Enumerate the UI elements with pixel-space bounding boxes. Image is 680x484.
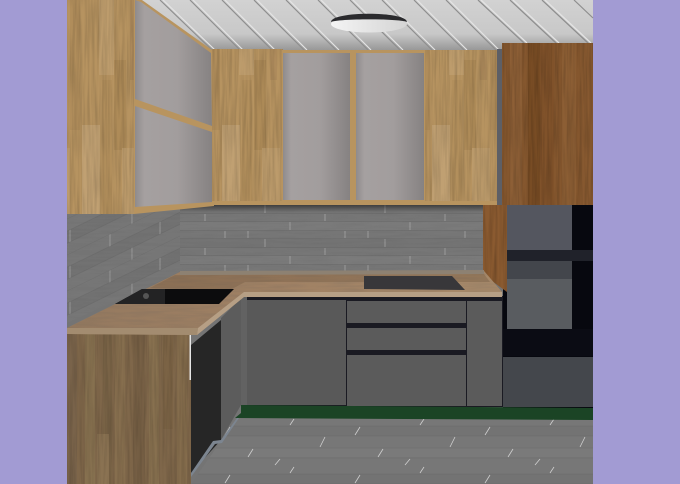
right niche with shelves	[503, 205, 593, 408]
ceiling light	[331, 14, 407, 32]
gap between upper cabinets	[497, 49, 503, 205]
upper centre glass double door	[282, 50, 426, 205]
sink	[115, 289, 234, 304]
upper middle wood panel right	[212, 50, 497, 205]
upper right walnut cabinet	[502, 43, 593, 205]
walnut column beside hob	[483, 205, 507, 292]
ceiling	[135, 0, 593, 52]
tiled backsplash: left wall	[67, 205, 180, 323]
L-shaped worktop	[67, 270, 502, 335]
upper corner glass door	[134, 0, 214, 214]
scene base fill	[67, 0, 593, 484]
tall wood end panel	[67, 334, 191, 484]
base cabinets	[241, 296, 503, 407]
left side base doors	[191, 296, 247, 477]
tiled backsplash: back wall	[134, 205, 504, 273]
floor	[191, 418, 593, 484]
upper left wood cabinet side	[67, 0, 134, 214]
green skirting	[235, 405, 593, 420]
induction hob	[364, 276, 465, 290]
upper middle wood panel left	[212, 49, 283, 205]
